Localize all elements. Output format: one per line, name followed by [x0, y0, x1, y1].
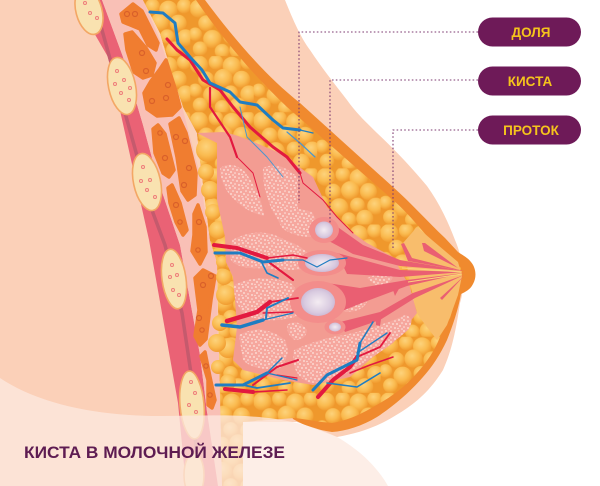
leader: проток	[393, 130, 478, 250]
label: доля	[478, 18, 581, 46]
blood vessels	[150, 12, 393, 397]
milk ducts	[327, 223, 464, 332]
areola	[403, 227, 462, 340]
leader: киста	[330, 80, 478, 223]
cysts	[290, 217, 346, 334]
bottom translucent band	[0, 378, 388, 486]
ribs	[70, 0, 207, 486]
body skin background	[0, 0, 463, 486]
muscle lobe spots	[124, 12, 214, 397]
label: киста	[478, 66, 581, 96]
yellow lines between ducts	[402, 268, 462, 282]
muscle band	[75, 0, 226, 486]
mammary gland tissue	[197, 132, 417, 385]
arteries red	[167, 39, 393, 397]
yellow vessel	[214, 249, 224, 251]
label: проток: ПРОТОК	[503, 123, 560, 138]
fatty tissue	[143, 0, 461, 486]
veins blue	[150, 12, 387, 390]
cyst small	[324, 320, 346, 334]
glandular speckle blobs	[220, 165, 411, 383]
light pink tissue	[102, 0, 240, 486]
label: доля: ДОЛЯ	[512, 25, 550, 40]
title: КИСТА В МОЛОЧНОЙ ЖЕЛЕЗЕ	[24, 443, 285, 462]
chest wall	[70, 0, 240, 486]
cyst middle	[298, 250, 346, 276]
rib spots	[84, 2, 198, 414]
dark muscle centre line	[92, 0, 198, 486]
leader lines	[299, 32, 478, 250]
leader: доля	[299, 32, 478, 203]
breast outer orange band	[143, 0, 475, 432]
cyst large	[290, 281, 346, 323]
muscle lobes	[121, 4, 215, 408]
cyst upper	[309, 217, 339, 243]
label: проток	[478, 116, 581, 144]
fat lobules along chest	[196, 138, 238, 390]
label: киста: КИСТА	[508, 74, 552, 89]
